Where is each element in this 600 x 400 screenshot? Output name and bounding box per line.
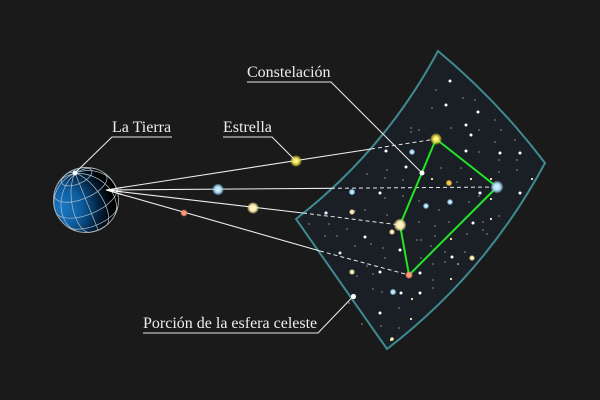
- constellation star: yellow: [430, 133, 442, 145]
- star on line: orange: [180, 209, 188, 217]
- label: Estrella: [223, 119, 296, 161]
- star on line: yellow: [290, 155, 302, 167]
- constellation star: orange: [405, 271, 413, 279]
- constellation star: blue: [490, 180, 504, 194]
- constellation figure: [400, 139, 497, 275]
- label: La Tierra: La Tierra: [112, 119, 171, 136]
- star on line: cream: [247, 202, 259, 214]
- label: La Tierra: [72, 119, 172, 176]
- background star field: [308, 80, 533, 341]
- star on line: blue: [212, 184, 224, 196]
- panel: portion of the celestial sphere: [296, 51, 545, 349]
- label: Porción de la esfera celeste: Porción de la esfera celeste: [143, 315, 317, 332]
- label: Estrella: Estrella: [223, 119, 272, 136]
- constellation star: cream: [394, 218, 406, 232]
- sight lines origin on Earth: [106, 188, 122, 194]
- label: Constelación: Constelación: [247, 64, 331, 81]
- label: Constelación: [247, 64, 424, 176]
- icon: Earth globe: [44, 158, 128, 242]
- sight lines from Earth to stars: [106, 139, 497, 275]
- label: Porción de la esfera celeste: [143, 294, 356, 333]
